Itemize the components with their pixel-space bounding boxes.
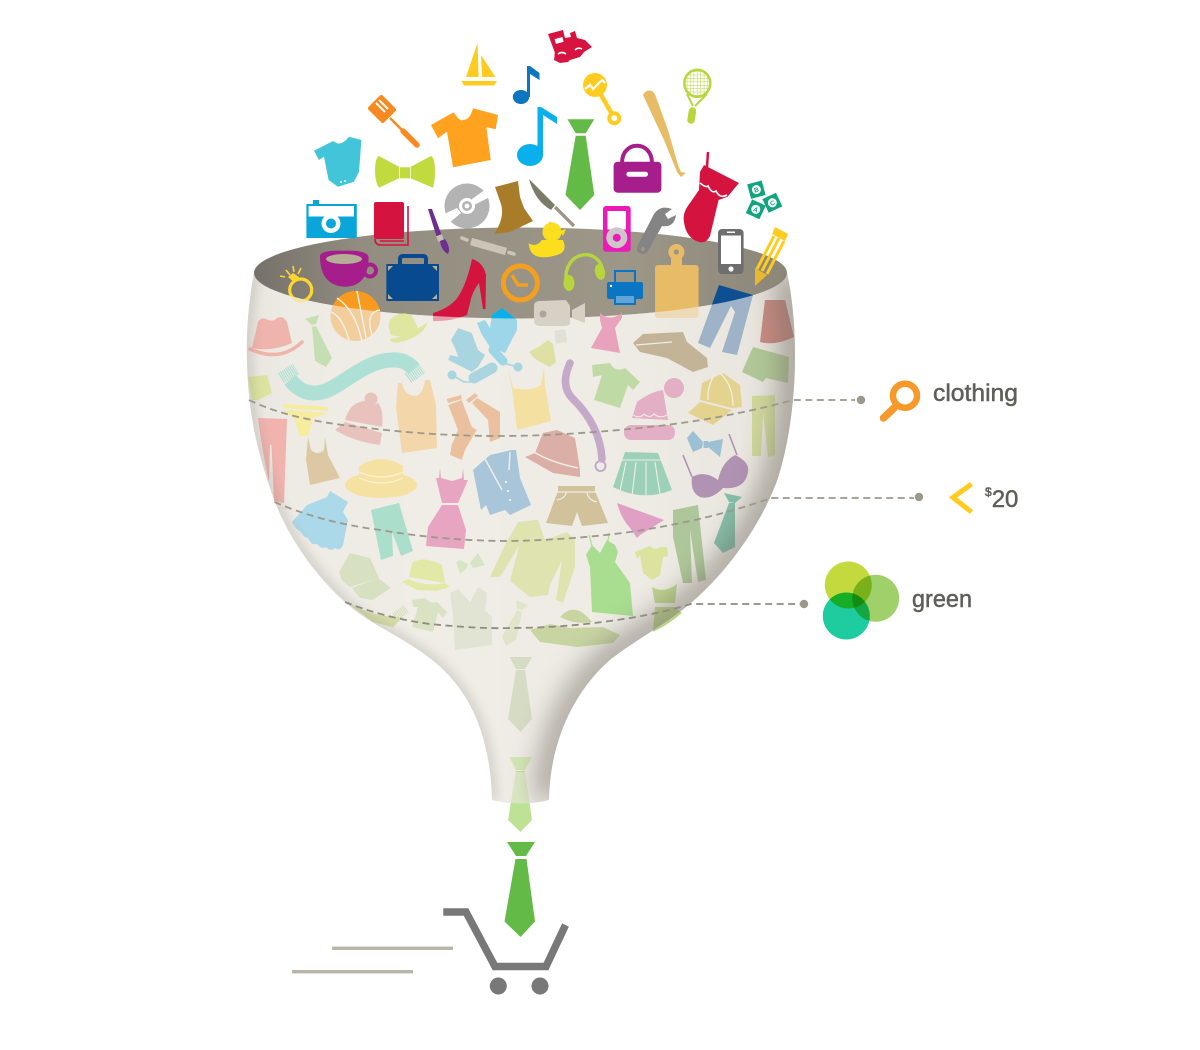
clothing: mini onesie	[529, 340, 556, 367]
icon: tennis racket	[684, 70, 710, 120]
icon: small music note	[513, 66, 540, 104]
clothing: denim vest	[473, 450, 531, 515]
icon: high heel	[433, 259, 486, 321]
cart motion lines	[292, 947, 453, 973]
falling necktie at neck	[508, 757, 532, 832]
icon: magnifying glass	[884, 384, 917, 418]
clothing: socks	[447, 393, 500, 460]
icon: bow tie	[375, 156, 435, 188]
clothing: tutu dress	[292, 491, 348, 550]
icon: wrench	[637, 208, 676, 254]
label: clothing: clothing	[933, 380, 1018, 407]
filter path: clothing	[249, 396, 865, 436]
funnel opening	[254, 228, 787, 318]
icon: diamond ring	[280, 266, 312, 301]
icon: colour circles	[823, 562, 899, 640]
icon: pencil	[755, 227, 788, 286]
icon: paint brush	[428, 209, 449, 254]
clothing: pink beanie	[624, 378, 684, 440]
clothing: camcorder	[534, 300, 585, 344]
clothing: teal tie	[714, 493, 742, 553]
filter: clothing search	[884, 380, 1018, 418]
clothing: tan tank top	[306, 437, 340, 485]
clothing: bell hat with bow	[525, 430, 580, 477]
clothing: sage pants	[673, 505, 706, 583]
icon: jeans	[698, 285, 753, 355]
clothing: belt	[565, 363, 606, 471]
clothing: long sleeve jacket	[490, 520, 575, 603]
icon: baby rattle	[583, 73, 619, 123]
clothing: yellow underwear	[283, 404, 328, 436]
icon: toy train	[548, 30, 592, 63]
icon: less-than chevron	[953, 484, 972, 512]
clothing: wide brim hat	[530, 610, 620, 647]
icon: large music note	[517, 107, 557, 166]
clothing: green top and skirt	[652, 584, 682, 632]
translucent funnel front	[247, 273, 795, 804]
clothing: tank top	[396, 380, 437, 453]
filter: price under 20	[953, 484, 1018, 513]
clothing: pom hat	[335, 392, 382, 445]
clothing: pink dress	[591, 313, 622, 353]
clothing: green tee	[592, 363, 640, 408]
icon: music player	[603, 206, 631, 252]
icon: sailboat	[462, 43, 497, 86]
icon: basketball	[330, 291, 380, 341]
clothing: pink strappy dress	[426, 468, 468, 549]
icon: cutting board	[655, 244, 699, 318]
clothing: camisole	[508, 367, 551, 430]
icon: briefcase	[386, 256, 439, 301]
funnel body	[247, 228, 795, 804]
clothing: yellow garment	[248, 375, 272, 400]
clothing: red hat	[250, 317, 302, 355]
icon: alphabet blocks: B	[753, 187, 760, 195]
clothing: yellow cap	[688, 373, 742, 425]
clothing: pale scarf	[348, 603, 406, 627]
icon: camera	[306, 200, 357, 238]
final green necktie	[504, 842, 535, 937]
clothing: pale bow tie	[456, 553, 485, 574]
icon: book	[374, 202, 408, 245]
icon: handbag	[614, 146, 661, 193]
clothing: khaki shorts	[546, 486, 608, 526]
icon: christmas stocking	[684, 152, 739, 242]
clothing: green shorts	[742, 347, 789, 383]
clothing: lime bell hat	[402, 559, 450, 591]
shopping cart	[443, 912, 566, 994]
icon: tea cup	[320, 251, 376, 287]
icon: green necktie	[566, 119, 594, 210]
clothing: bra	[683, 434, 748, 498]
clothing: visor	[633, 332, 708, 372]
filter path: colour	[345, 600, 808, 628]
clothing: scarf	[281, 360, 422, 393]
falling necktie in neck	[508, 657, 532, 732]
clothing: lime hat	[389, 313, 427, 343]
clothing: pale tee	[412, 598, 447, 632]
label: green: green	[912, 586, 972, 613]
icon: cowboy boot	[494, 181, 533, 234]
clothing: straw hat	[345, 459, 417, 498]
icon: spatula	[367, 94, 417, 145]
icon: compact disc	[442, 184, 490, 228]
icon: rolling pin	[462, 238, 514, 254]
icon: alphabet blocks: A	[752, 206, 759, 215]
icons falling into the funnel	[280, 30, 788, 361]
clothing: pale vest top	[450, 587, 492, 650]
clothing items inside the funnel	[248, 300, 794, 650]
icon: baseball bat	[643, 90, 686, 177]
clothing: mittens	[448, 328, 522, 382]
icon: alphabet blocks	[746, 180, 782, 219]
filter: green colour	[823, 562, 972, 640]
clothing: green dress	[586, 533, 633, 616]
clothing: pale pants	[752, 395, 775, 457]
icon: baby onesie	[314, 137, 361, 187]
icon: clock	[503, 266, 537, 300]
filter path: price	[274, 493, 923, 541]
clothing: red skirt	[760, 300, 794, 343]
infographic: product filter funnel	[246, 30, 1018, 994]
funnel shading	[247, 273, 795, 800]
icon: kitchen knife	[529, 179, 574, 226]
icon: smartphone	[718, 229, 744, 274]
clothing: pleated skirt	[613, 452, 672, 497]
clothing: pale cap	[339, 553, 391, 600]
icon: blue mitten top	[477, 308, 517, 361]
clothing: blue bow tie	[687, 431, 723, 457]
icon: orange t-shirt	[431, 108, 498, 167]
icon: printer	[607, 271, 643, 305]
clothing: pale tie	[502, 600, 528, 646]
icon: headphones	[564, 255, 607, 291]
label: $20: 20	[992, 486, 1018, 513]
neck front tint	[492, 772, 549, 804]
clothing: small green tie	[305, 315, 332, 367]
icon: rubber duck	[529, 222, 566, 257]
clothing: red pants	[258, 418, 287, 503]
icon: alphabet blocks: C	[769, 199, 777, 208]
clothing: teal pants	[371, 503, 413, 560]
label: $20: $	[985, 485, 992, 499]
clothing: pale onesie	[635, 546, 668, 580]
clothing: pink briefs	[617, 503, 664, 538]
